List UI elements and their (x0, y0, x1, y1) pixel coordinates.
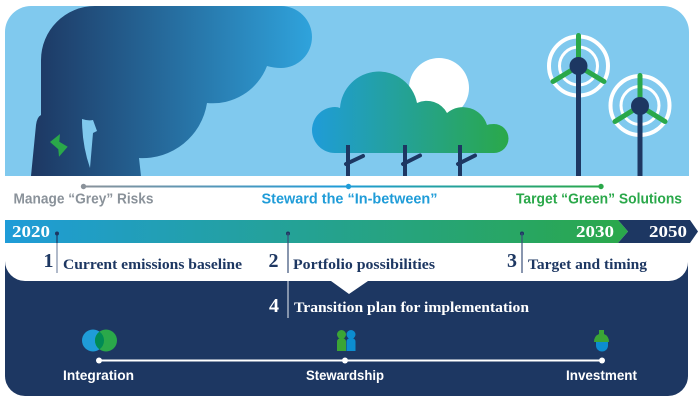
sun (409, 58, 469, 118)
icon: integration overlapping circles (82, 330, 117, 352)
label 2050: 2050 (649, 222, 687, 241)
label stewardship: Stewardship (306, 368, 384, 383)
icon: investment acorn (594, 330, 609, 352)
icon: green lightning bolt (50, 134, 68, 157)
sky background (5, 6, 689, 176)
timeline bar 2030 to 2050 (618, 220, 698, 243)
label 2020: 2020 (12, 222, 50, 241)
wind turbine left (549, 36, 608, 176)
green transition cloud (312, 72, 508, 153)
step 4: 4 (269, 295, 279, 317)
step 3: Target and timing (528, 257, 648, 273)
step 2: Portfolio possibilities (293, 257, 435, 273)
heading: manage grey risks: Manage “Grey” Risks (14, 192, 154, 208)
step 1: Current emissions baseline (63, 257, 243, 273)
heading: steward the in-between: Steward the “In-between” (262, 192, 438, 208)
heading: target green solutions: Target “Green” Solutions (516, 192, 682, 208)
timeline bar 2020 to 2030 (5, 220, 628, 243)
step 2 (268, 232, 435, 273)
step 1 (44, 232, 243, 273)
label 2030: 2030 (576, 222, 614, 241)
step 3 (507, 232, 648, 273)
step 3: 3 (507, 250, 517, 272)
grey emissions cloud and cooling tower (31, 6, 312, 176)
bottom connector line (96, 358, 605, 364)
trees (346, 145, 475, 176)
label integration: Integration (63, 368, 134, 383)
label investment: Investment (566, 368, 637, 383)
step 4 (269, 281, 529, 318)
panel: white steps band (5, 243, 688, 294)
icon: stewardship people (337, 330, 356, 351)
panel: sky scene (5, 6, 689, 176)
panel: navy transition plan (5, 243, 688, 396)
step 1: 1 (44, 250, 54, 272)
step 2: 2 (268, 250, 278, 272)
three stage line (81, 184, 604, 189)
wind turbine right (610, 76, 670, 176)
step 4: Transition plan for implementation (294, 300, 529, 316)
tower gap (82, 119, 97, 168)
